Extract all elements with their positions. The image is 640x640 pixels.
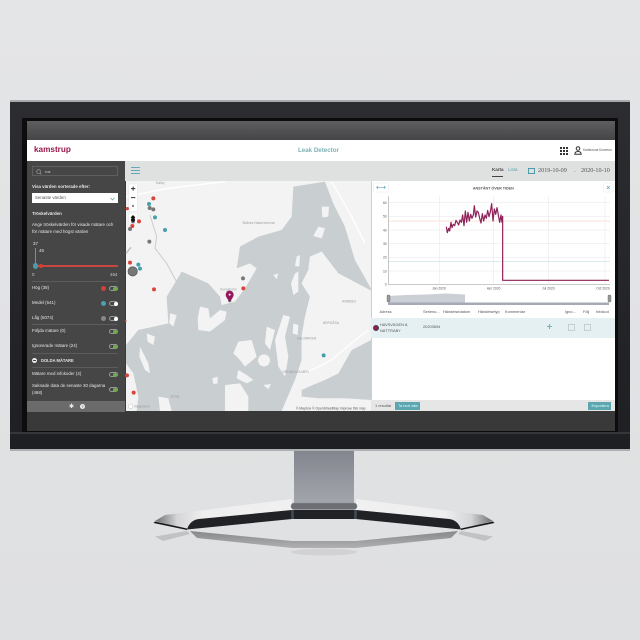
button: remove all bbox=[395, 402, 420, 410]
result count: 1 resultat bbox=[375, 402, 391, 408]
map: ANNEBO bbox=[342, 300, 356, 304]
logo: kamstrup bbox=[34, 145, 71, 154]
address bbox=[380, 322, 408, 333]
base reflection bbox=[155, 531, 493, 556]
panel: sidebar bbox=[27, 161, 125, 412]
button: export bbox=[588, 402, 611, 410]
threshold description bbox=[32, 222, 114, 234]
date range: → bbox=[572, 168, 577, 174]
y axis labels: 10 bbox=[383, 269, 387, 273]
icon: calendar bbox=[528, 168, 534, 174]
button: remove all: Ta bort alla bbox=[398, 403, 418, 408]
x axis labels: Oct 2020 bbox=[596, 286, 610, 290]
hidden meters heading: DOLDA MÄTARE bbox=[41, 358, 74, 362]
expand button bbox=[374, 183, 388, 192]
threshold description: Ange tröskelvärden för visade mätare och bbox=[32, 222, 113, 226]
checkbox: ignore bbox=[568, 324, 575, 330]
map attribution: mapbox bbox=[134, 404, 150, 409]
date range: 2020-10-10 bbox=[581, 167, 610, 174]
app header bar bbox=[27, 140, 615, 161]
meter markers bbox=[125, 196, 326, 395]
sort dropdown bbox=[32, 193, 118, 203]
map: Skånes Naturreservat bbox=[242, 221, 275, 225]
tab: Karta: Karta bbox=[492, 167, 504, 172]
button: export: Exportera bbox=[592, 403, 609, 408]
table header bbox=[380, 308, 609, 314]
threshold slider: 46 bbox=[39, 248, 44, 253]
x axis labels: Jan 2020 bbox=[432, 286, 446, 290]
table footer bbox=[371, 400, 615, 411]
screen bbox=[27, 121, 615, 431]
threshold description: för mätare med högst värden bbox=[32, 229, 88, 234]
table header: Serienu... bbox=[423, 308, 440, 314]
filter: Följda mätare: Följda mätare (0) bbox=[32, 328, 65, 333]
sidebar footer: ? bbox=[81, 404, 84, 409]
map: Boras bbox=[171, 395, 180, 399]
filter: Saknade data: Saknade data de senaste 30 dagarna bbox=[32, 382, 105, 388]
date range bbox=[538, 167, 610, 174]
filter: Mätare med infokoder: Mätare med infokoder (4) bbox=[32, 371, 81, 376]
x axis labels: Jul 2020 bbox=[542, 286, 555, 290]
table header: Händelsetyp bbox=[478, 308, 500, 314]
x axis labels bbox=[432, 286, 610, 290]
y axis labels: 50 bbox=[383, 215, 387, 219]
y axis labels: 20 bbox=[383, 256, 387, 260]
chart bbox=[374, 182, 614, 290]
filter: Låg: Låg (5074) bbox=[32, 315, 53, 320]
threshold heading: Tröskelvärden bbox=[32, 211, 62, 216]
table header: Kommentar bbox=[505, 308, 525, 314]
table header: Följ bbox=[583, 308, 589, 314]
app title: Leak Detector bbox=[298, 146, 339, 154]
date range: 2019-10-09 bbox=[538, 167, 567, 174]
icon: app grid bbox=[560, 147, 568, 155]
y axis labels bbox=[383, 201, 387, 287]
filter: Hög: Hög (38) bbox=[32, 285, 49, 290]
filter: Medel: Medel (541) bbox=[32, 300, 55, 305]
threshold slider: 0 bbox=[32, 272, 34, 277]
data line bbox=[446, 204, 609, 280]
threshold slider bbox=[32, 241, 118, 277]
x axis labels: Apr 2020 bbox=[487, 286, 501, 290]
serial number: 20203694 bbox=[423, 324, 440, 329]
sidebar footer: ✱ bbox=[69, 404, 74, 410]
y axis labels: 0 bbox=[385, 283, 387, 287]
y axis labels: 60 bbox=[383, 201, 387, 205]
map: Dalby bbox=[156, 181, 165, 185]
y axis labels: 30 bbox=[383, 242, 387, 246]
y axis labels: 40 bbox=[383, 228, 387, 232]
checkbox: follow bbox=[584, 324, 591, 330]
map: GRUNDHOLMEN bbox=[282, 370, 309, 374]
table row bbox=[371, 318, 615, 338]
sidebar footer bbox=[27, 401, 125, 412]
threshold slider: 37 bbox=[33, 241, 38, 246]
map attribution: © Mapbox © OpenStreetMap Improve this map bbox=[296, 407, 366, 411]
table header: Händelsedatum bbox=[443, 308, 470, 314]
icon: add comment bbox=[547, 324, 552, 329]
toolbar bbox=[125, 161, 615, 181]
table header: Igno... bbox=[565, 308, 576, 314]
user name: Karlskrona Kommun bbox=[583, 148, 612, 152]
table header: Infokod bbox=[596, 308, 609, 314]
table header: Adress bbox=[380, 308, 392, 314]
filter: Hög bbox=[32, 281, 118, 291]
icon: user bbox=[574, 146, 582, 155]
monitor frame bbox=[10, 100, 630, 451]
address: HAVSVÄGEN 8, bbox=[380, 322, 408, 327]
chart title: ANSTÅNT ÖVER TIDEN bbox=[473, 186, 514, 191]
sort heading: Visa värden sorterade efter: bbox=[32, 184, 90, 188]
filter: Saknade data bbox=[32, 382, 118, 395]
map: SALTARKEN bbox=[297, 337, 317, 341]
selected meter pin bbox=[226, 291, 234, 302]
map bbox=[125, 181, 371, 411]
panel: details bbox=[371, 181, 615, 411]
close button bbox=[604, 183, 613, 192]
address: NÄTTRABY bbox=[380, 328, 401, 333]
filter: Ignorerade mätare: Ignorerade mätare (24) bbox=[32, 343, 77, 348]
map attribution bbox=[128, 404, 366, 411]
map zoom controls bbox=[129, 184, 137, 223]
map: Kungsholm bbox=[220, 288, 237, 292]
sort dropdown: Senaste värden bbox=[35, 195, 66, 200]
threshold slider: 464 bbox=[110, 272, 117, 277]
range navigator selector bbox=[386, 294, 612, 305]
map: BERGÅSA bbox=[323, 320, 340, 325]
sidebar search box: ros bbox=[45, 169, 51, 174]
filter: Medel bbox=[32, 300, 118, 306]
sidebar search box bbox=[32, 166, 118, 176]
filter: Saknade data: (468) bbox=[32, 390, 42, 395]
hidden meters heading bbox=[32, 353, 118, 363]
tab: Lista: Lista bbox=[508, 167, 518, 172]
filter: Låg bbox=[32, 315, 118, 321]
tab: Karta bbox=[492, 168, 503, 177]
row marker bbox=[372, 324, 379, 331]
water bbox=[126, 182, 371, 411]
icon: menu bbox=[131, 167, 140, 174]
